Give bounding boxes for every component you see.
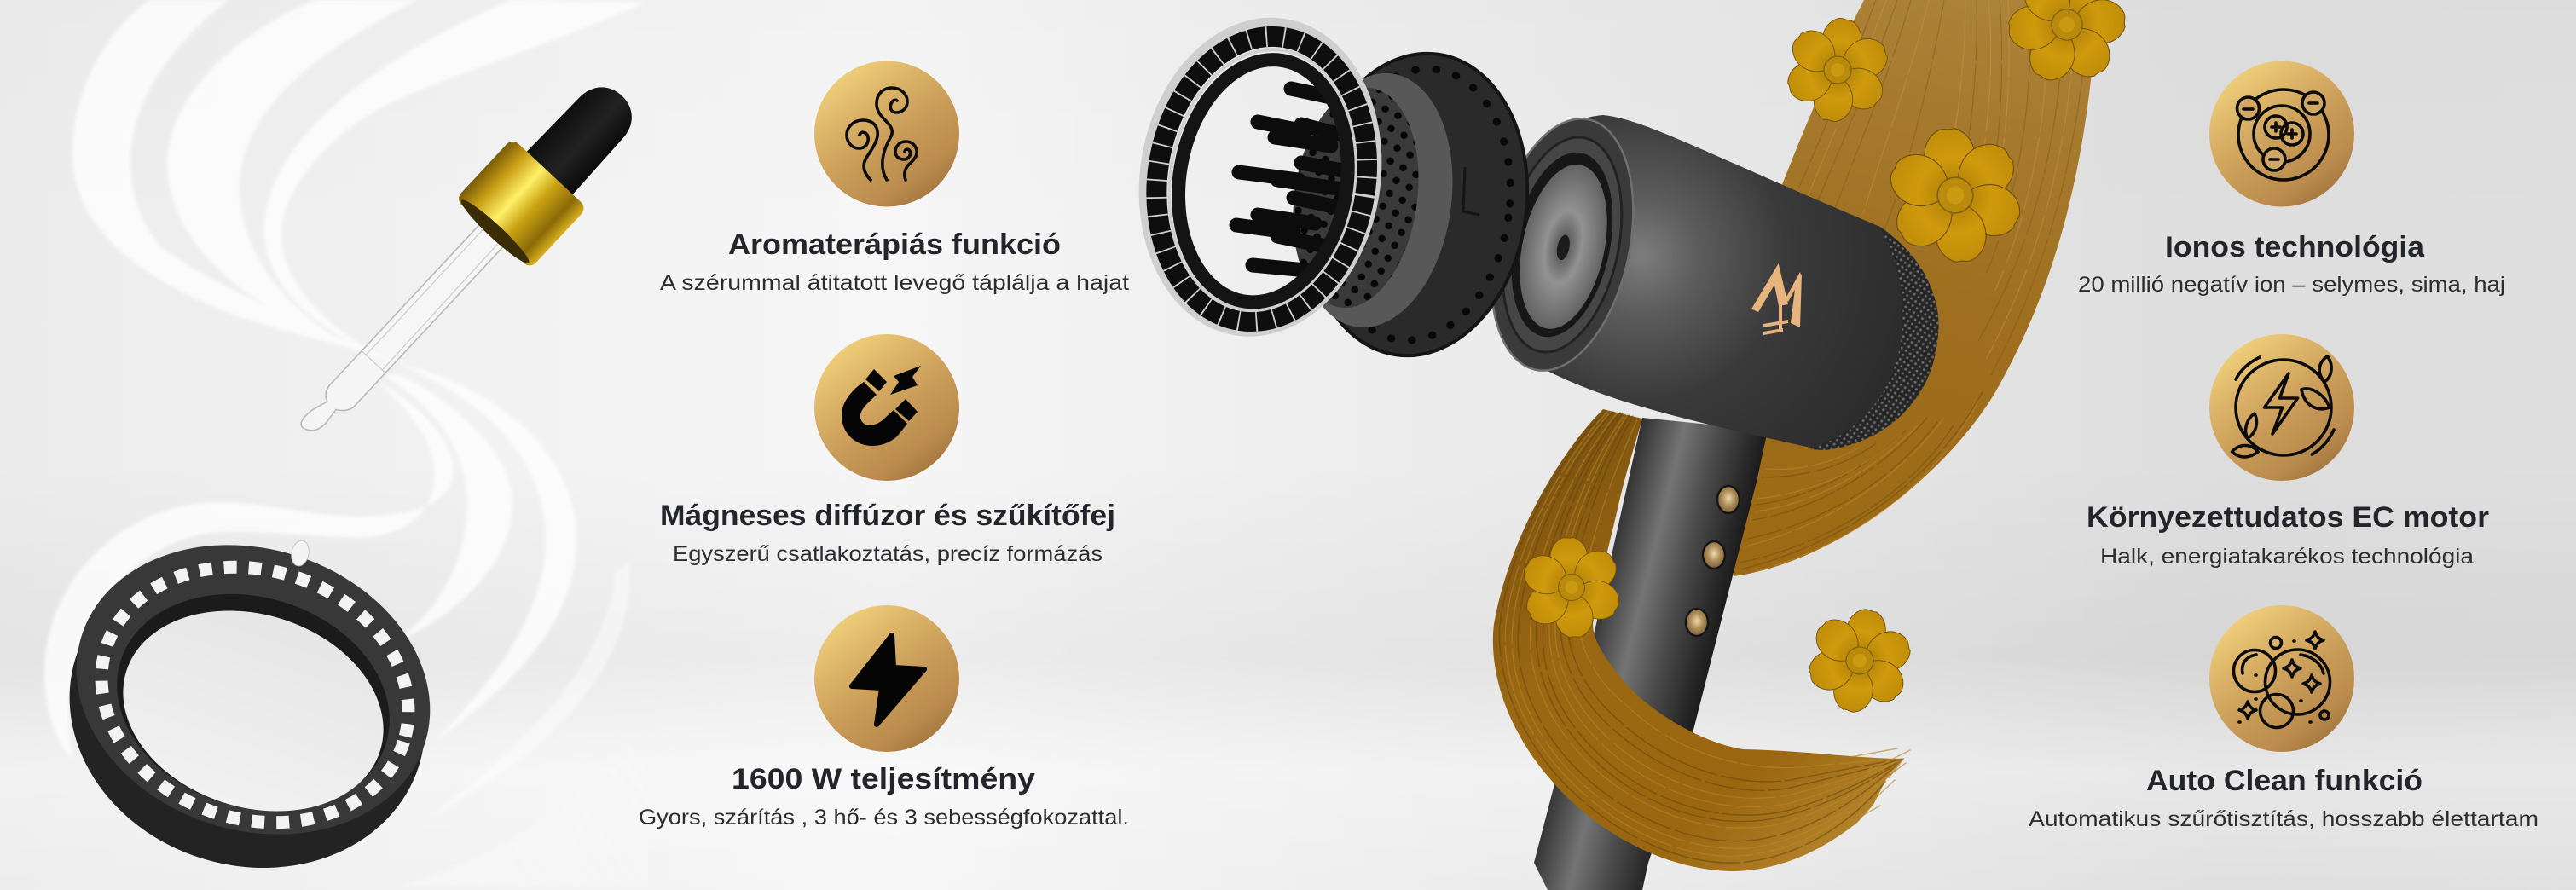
feature: eco EC motor: [2087, 334, 2489, 569]
hair strand behind dryer: [1705, 0, 2098, 576]
heading: Mágneses diffúzor és szűkítőfej: [660, 500, 1115, 532]
heading: 1600 W teljesítmény: [732, 763, 1035, 795]
glass tube: [296, 222, 506, 443]
flower: large on hair: [1876, 118, 2035, 272]
control buttons: [1686, 486, 1740, 636]
description: 20 millió negatív ion – selymes, sima, haj: [2078, 273, 2505, 297]
heading: Ionos technológia: [2165, 231, 2425, 263]
gold icon disc: aroma swirls: [814, 61, 959, 206]
feature: aromatherapy: [660, 61, 1129, 295]
gold icon disc: lightning: [814, 605, 959, 752]
pins: [1236, 89, 1342, 271]
diffuser attachment: [1121, 5, 1547, 370]
front air outlet: [1470, 106, 1654, 384]
gold icon disc: bubbles: [2209, 605, 2354, 752]
flower: floating right: [1796, 598, 1924, 723]
bowl: [1281, 63, 1468, 338]
feature: 1600 W power: [639, 605, 1129, 829]
heading: Aromaterápiás funkció: [728, 228, 1061, 261]
illustration: serum dropper: [270, 61, 659, 467]
heading: Auto Clean funkció: [2146, 765, 2423, 797]
front grille ring: [1121, 5, 1399, 350]
hair strand wrapping handle: [1493, 409, 1910, 871]
white smoke wisps: [44, 0, 648, 887]
flower: top small: [1776, 11, 1899, 129]
illustration: black ring accessory: [30, 501, 467, 890]
feature: ion technology: [2078, 61, 2505, 297]
hair dryer handle: [1534, 418, 1768, 890]
heading: Környezettudatos EC motor: [2087, 501, 2489, 534]
gold icon disc: magnet: [814, 334, 959, 481]
gold icon disc: ions: [2209, 61, 2354, 206]
description: Automatikus szűrőtisztítás, hosszabb élettartam: [2029, 807, 2538, 831]
hair dryer body: [1470, 106, 1939, 450]
rubber bulb: [522, 74, 645, 199]
description: Egyszerű csatlakoztatás, precíz formázás: [673, 542, 1103, 566]
feature: magnetic diffuser: [660, 334, 1115, 566]
feature: auto clean: [2029, 605, 2538, 831]
gold icon disc: eco motor: [2209, 334, 2354, 481]
description: A szérummal átitatott levegő táplálja a hajat: [660, 271, 1129, 295]
description: Gyors, szárítás , 3 hő- és 3 sebességfokozattal.: [639, 806, 1129, 829]
flower: on hair left: [1514, 533, 1629, 642]
brand logo: [1751, 263, 1802, 335]
gold collar: [453, 138, 588, 271]
knurled rear band: [1810, 228, 1939, 450]
description: Halk, energiatakarékos technológia: [2100, 545, 2474, 569]
flower: top corner: [1987, 0, 2147, 104]
back plate: [1288, 39, 1547, 370]
